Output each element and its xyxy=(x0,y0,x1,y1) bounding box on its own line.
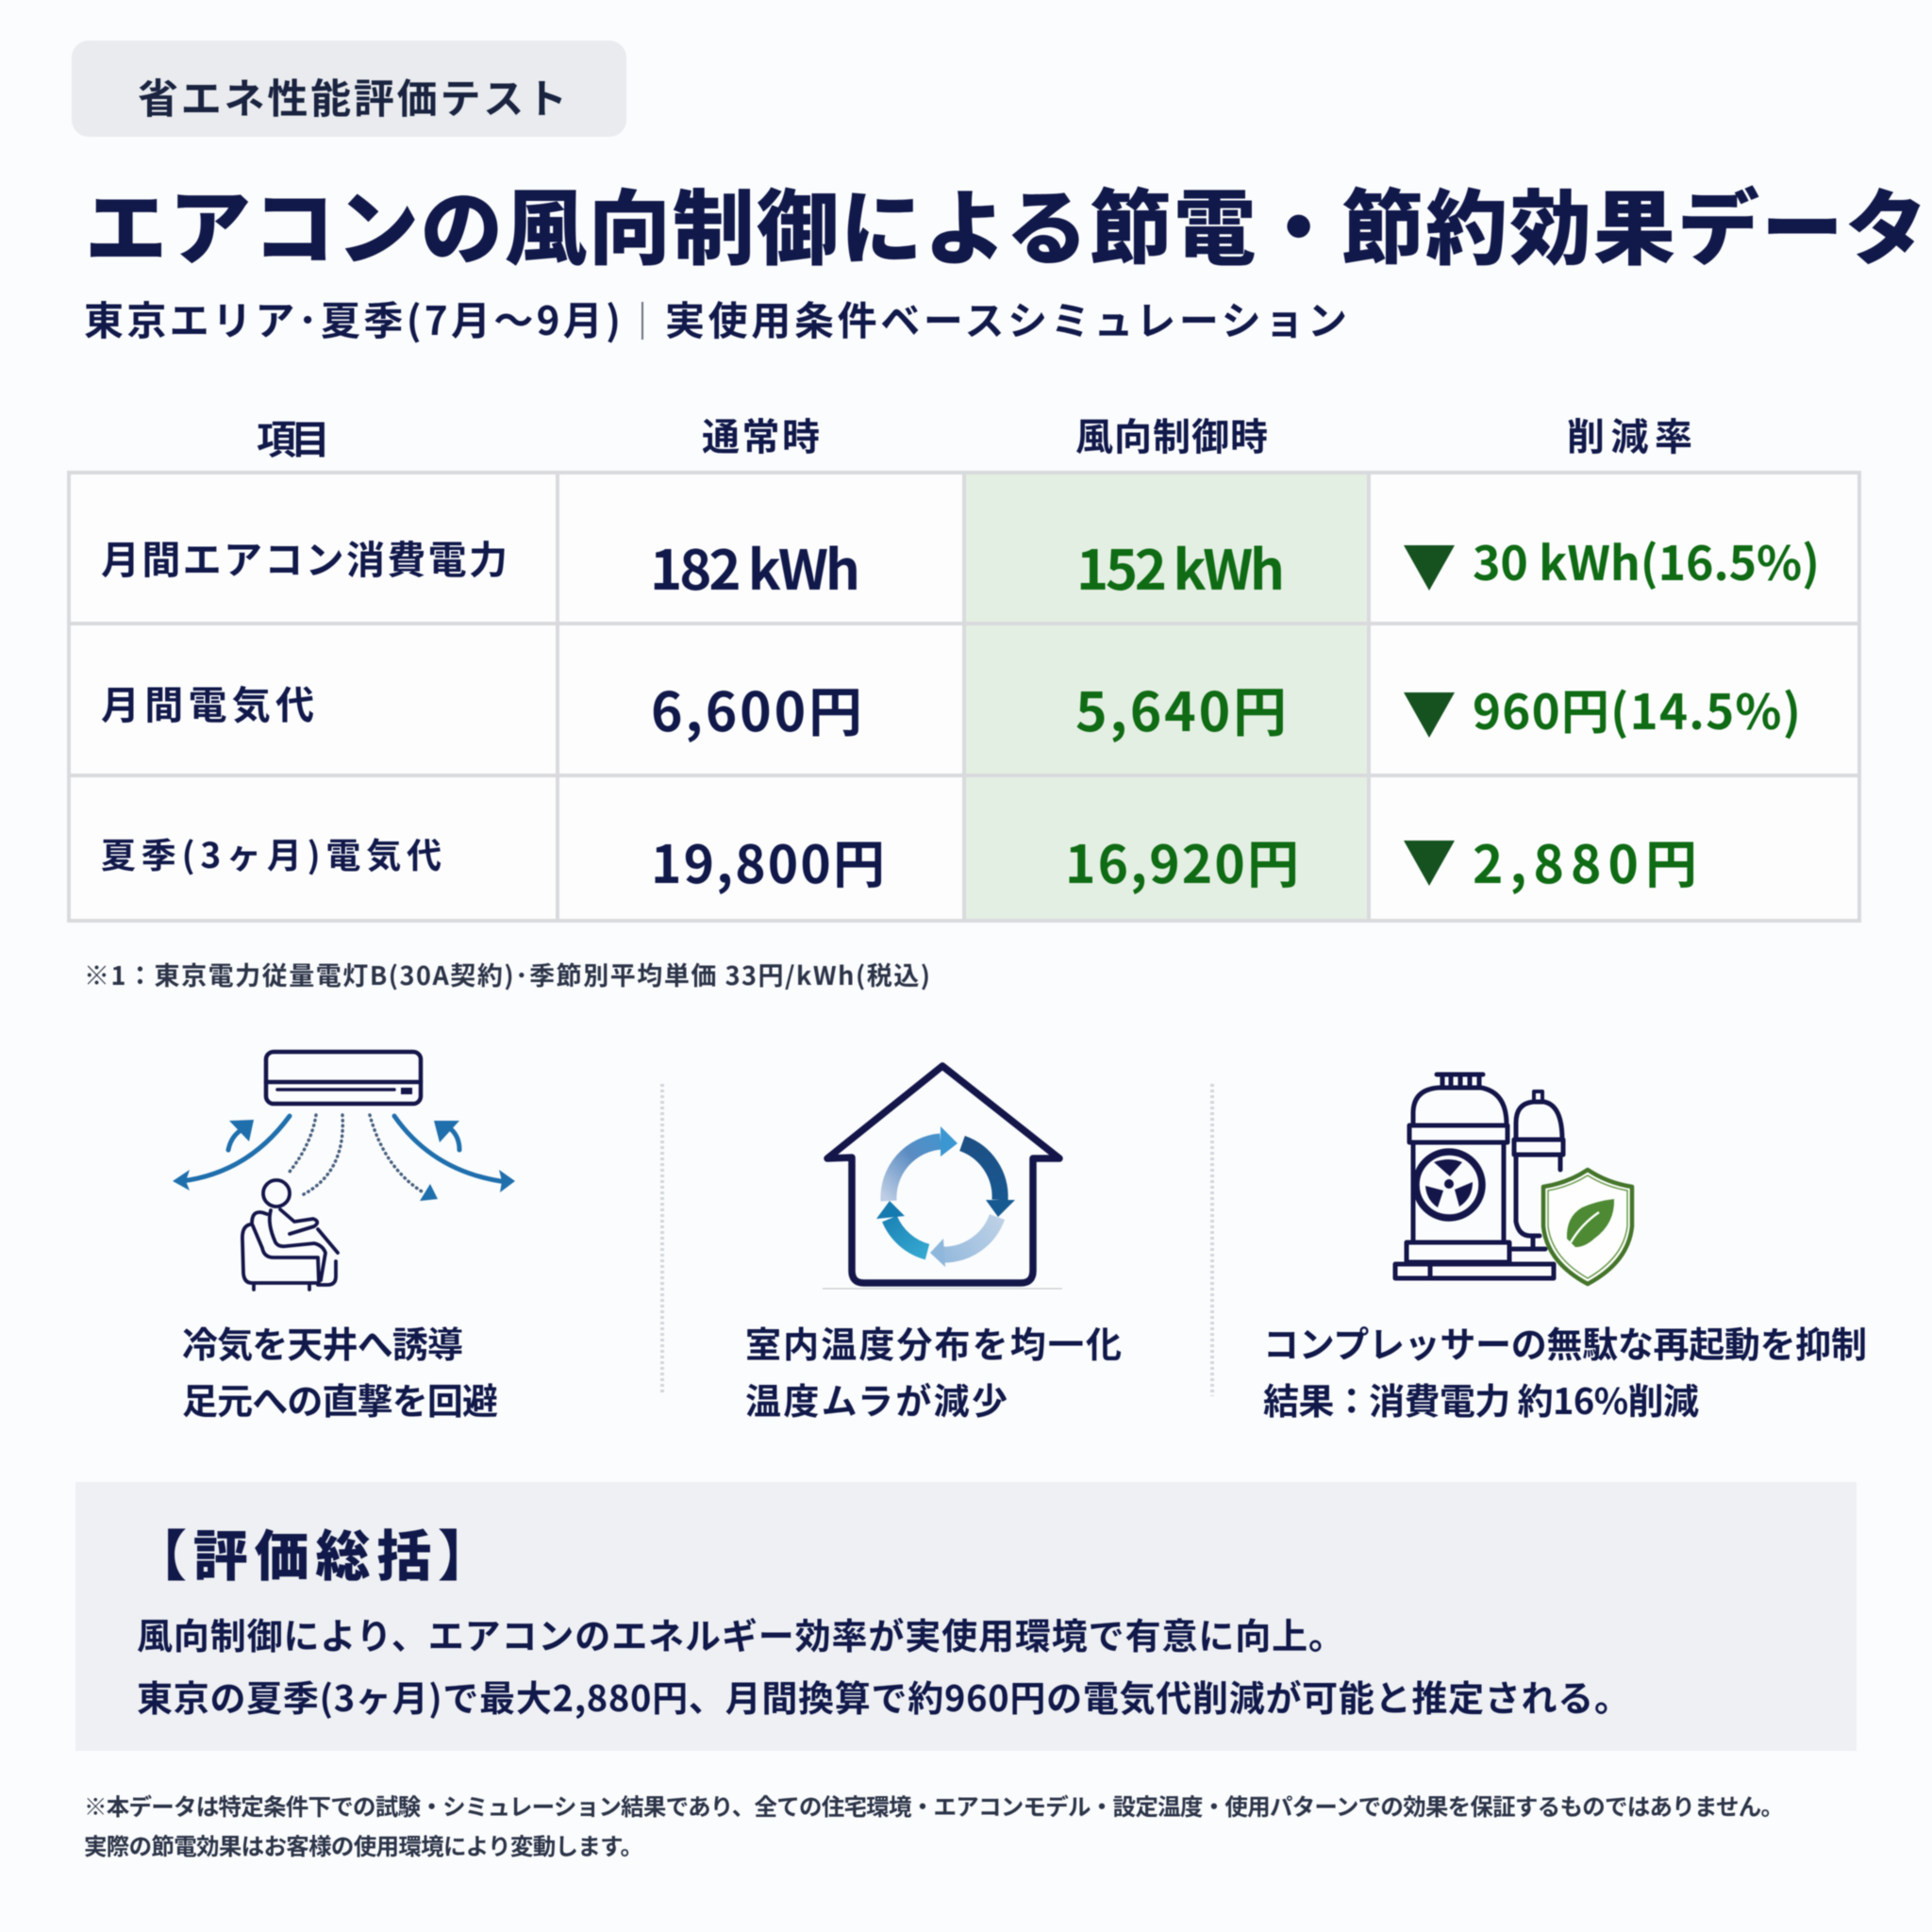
caption: compressor xyxy=(1263,1316,1867,1424)
icon: house with circulation arrows xyxy=(823,1066,1062,1289)
row: monthly power consumption: 月間エアコン消費電力 xyxy=(101,528,508,585)
caption: compressor: コンプレッサーの無駄な再起動を抑制 xyxy=(1263,1316,1867,1368)
row: monthly power consumption: 152 kWh xyxy=(1076,526,1285,606)
row: monthly electricity cost: 5,640円 xyxy=(1075,670,1287,747)
row: summer electricity cost: 16,920円 xyxy=(1065,823,1299,898)
subtitle: 東京エリア･夏季(7月～9月) xyxy=(84,290,621,347)
row: monthly electricity cost xyxy=(101,670,1801,747)
caption: temperature distribution xyxy=(745,1316,1122,1424)
icon: compressor with leaf shield xyxy=(1395,1074,1632,1284)
comparison table xyxy=(69,407,1859,921)
subtitle: 実使用条件ベースシミュレーション xyxy=(665,290,1347,347)
row: monthly electricity cost: 月間電気代 xyxy=(101,674,314,730)
divider xyxy=(1210,1084,1214,1396)
table header row: 削減率 xyxy=(1567,407,1692,461)
table header row xyxy=(257,407,1692,466)
disclaimer: ※本データは特定条件下での試験・シミュレーション結果であり、全ての住宅環境・エアコンモデル・設定温度・使用パターンでの効果を保証するものではありません。 xyxy=(84,1790,1784,1823)
caption: compressor: 結果：消費電力 約16%削減 xyxy=(1263,1373,1699,1424)
tag: test category xyxy=(72,41,626,137)
table header row: 風向制御時 xyxy=(1075,407,1268,461)
row: monthly power consumption xyxy=(101,526,1820,606)
row: monthly electricity cost: 6,600円 xyxy=(651,670,862,747)
summary heading: 【評価総括】 xyxy=(132,1512,492,1591)
table header row: 通常時 xyxy=(702,407,820,461)
row: summer electricity cost: 19,800円 xyxy=(651,823,885,898)
title: エアコンの風向制御による節電・節約効果データ xyxy=(85,163,1927,282)
summary text: 東京の夏季(3ヶ月)で最大2,880円、月間換算で約960円の電気代削減が可能と推定される。 xyxy=(137,1670,1630,1722)
caption: temperature distribution: 室内温度分布を均一化 xyxy=(745,1316,1122,1368)
caption: airflow: 冷気を天井へ誘導 xyxy=(182,1316,463,1368)
row: monthly power consumption: 30 kWh(16.5%) xyxy=(1473,526,1820,594)
row: summer electricity cost: 夏季(3ヶ月)電気代 xyxy=(101,827,441,878)
footnote: ※1：東京電力従量電灯B(30A契約)･季節別平均単価 33円/kWh(税込) xyxy=(84,956,930,992)
caption: airflow: 足元への直撃を回避 xyxy=(182,1373,498,1424)
row: summer electricity cost: 2,880円 xyxy=(1473,823,1697,898)
summary text xyxy=(137,1607,1630,1722)
row: monthly electricity cost: 960円(14.5%) xyxy=(1473,674,1801,743)
icon: air conditioner airflow xyxy=(173,1052,515,1290)
disclaimer: 実際の節電効果はお客様の使用環境により変動します。 xyxy=(84,1829,643,1862)
divider xyxy=(660,1084,664,1392)
caption: airflow xyxy=(182,1316,498,1424)
tag: test category: 省エネ性能評価テスト xyxy=(138,67,567,125)
disclaimer xyxy=(84,1790,1784,1862)
subtitle xyxy=(84,290,1347,347)
row: monthly power consumption: 182 kWh xyxy=(650,526,860,606)
table grid xyxy=(69,473,1859,921)
row: summer electricity cost xyxy=(101,823,1697,898)
table header row: 項目 xyxy=(257,408,330,466)
panel: evaluation summary xyxy=(75,1482,1857,1751)
caption: temperature distribution: 温度ムラが減少 xyxy=(745,1373,1008,1424)
summary text: 風向制御により、エアコンのエネルギー効率が実使用環境で有意に向上。 xyxy=(137,1607,1344,1659)
